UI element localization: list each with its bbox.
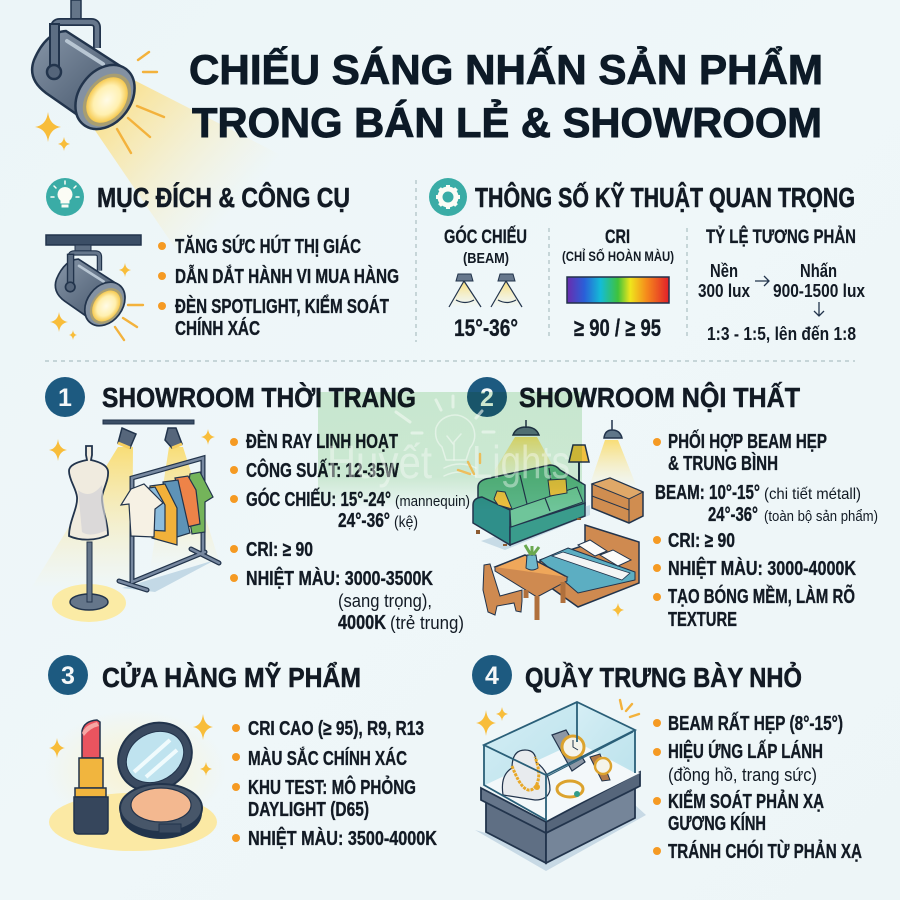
contrast ratio column: Nhấn [800,261,837,281]
bullet list: furniture: & TRUNG BÌNH [668,452,778,475]
bullet list: purpose [158,234,399,340]
bullet list: cosmetics [232,718,437,850]
bullet list: display counter: HIỆU ỨNG LẤP LÁNH [668,739,823,763]
illustration: mannequin and clothing rack [30,420,222,622]
icon: beam lamps [449,274,522,307]
watermark overlay: Lights [472,436,570,488]
bullet list: fashion: NHIỆT MÀU: 3000-3500K [246,566,433,590]
number badge 3: 3 [61,662,75,690]
CRI column [562,227,674,342]
bullet list: furniture: 24°-36° [708,504,758,526]
number badge 2 [467,377,507,417]
watermark overlay: Huyết [327,436,432,488]
bullet list: display counter: (đồng hồ, trang sức) [668,765,817,785]
bullet list: cosmetics: MÀU SẮC CHÍNH XÁC [248,746,407,770]
bullet list: fashion: (kệ) [394,514,418,531]
panel: technical specifications [429,178,865,344]
bullet list: cosmetics: KHU TEST: MÔ PHỎNG [248,775,416,799]
bullet list: fashion: 24°-36° [338,510,390,532]
beam angle column: 15°-36° [454,315,518,342]
bullet list: display counter: BEAM RẤT HẸP (8°-15°) [668,712,843,735]
bullet list: fashion: 4000K [338,612,386,634]
contrast ratio column [698,226,865,344]
contrast ratio column: 900-1500 lux [773,281,865,301]
bullet list: purpose: ĐÈN SPOTLIGHT, KIỂM SOÁT [175,295,389,318]
contrast ratio column: 1:3 - 1:5, lên đến 1:8 [707,324,856,344]
bullet list: cosmetics: DAYLIGHT (D65) [248,799,369,821]
beam angle column: GÓC CHIẾU [444,226,527,248]
bullet list: furniture: BEAM: 10°-15° [655,482,760,504]
bullet list: fashion: GÓC CHIẾU: 15°-24° [246,487,391,511]
title: CHIẾU SÁNG NHẤN SẢN PHẨM [189,45,823,93]
bullet list: fashion: (mannequin) [395,493,470,510]
number badge 1: 1 [58,384,72,412]
arrow: accent to ratio [814,302,824,316]
beam angle column [444,226,527,342]
icon: gear [429,178,467,216]
title: TRONG BÁN LẺ & SHOWROOM [192,98,822,146]
contrast ratio column: 300 lux [698,281,750,301]
bullet list: furniture [653,429,878,631]
number badge 2: 2 [480,384,494,412]
bullet list: display counter: KIỂM SOÁT PHẢN XẠ [668,790,824,813]
bullet list: furniture: (toàn bộ sản phẩm) [764,508,878,525]
illustration: lipstick and compact [45,709,225,851]
panel: 4 small display counter [472,655,862,871]
bullet list: fashion: CRI: ≥ 90 [246,539,313,561]
bullet list: purpose: TĂNG SỨC HÚT THỊ GIÁC [175,234,361,258]
number badge 3 [48,655,88,695]
heading: furniture showroom: SHOWROOM NỘI THẤT [519,381,800,413]
bullet list: fashion [230,430,470,634]
heading: cosmetics store: CỬA HÀNG MỸ PHẨM [102,661,361,693]
number badge 4 [472,655,512,695]
CRI column: CRI [605,227,630,248]
watermark overlay [318,392,582,510]
bullet list: fashion: (trẻ trung) [390,613,464,633]
heading: fashion showroom: SHOWROOM THỜI TRANG [102,382,416,413]
bullet list: cosmetics: NHIỆT MÀU: 3500-4000K [248,826,437,850]
bullet list: display counter: GƯƠNG KÍNH [668,812,766,835]
bullet list: purpose: DẪN DẮT HÀNH VI MUA HÀNG [175,264,399,288]
bullet list: fashion: CÔNG SUẤT: 12-35W [246,458,399,482]
bullet list: purpose: CHÍNH XÁC [175,317,260,340]
arrow: base to accent [755,276,769,286]
CRI colour spectrum [567,277,669,303]
bullet list: furniture: CRI: ≥ 90 [668,530,735,552]
icon: track spotlight [46,235,143,340]
CRI column: ≥ 90 / ≥ 95 [574,315,661,342]
main spotlight illustration [32,0,330,290]
beam angle column: (BEAM) [463,250,509,267]
bullet list: display counter [653,712,862,863]
panel: 2 furniture showroom [467,377,878,631]
panel: 3 cosmetics store [45,655,437,851]
bullet list: fashion: ĐÈN RAY LINH HOẠT [246,430,398,453]
title [189,45,823,146]
heading: purpose and tools: MỤC ĐÍCH & CÔNG CỤ [97,181,350,213]
bullet list: fashion: (sang trọng), [338,591,432,611]
bullet list: cosmetics: CRI CAO (≥ 95), R9, R13 [248,718,424,740]
panel: purpose and tools [46,178,399,340]
panel: 1 fashion showroom [30,377,470,634]
number badge 1 [45,377,85,417]
bullet list: furniture: TEXTURE [668,609,737,631]
contrast ratio column: Nền [710,261,738,281]
bullet list: furniture: NHIỆT MÀU: 3000-4000K [668,556,856,580]
number badge 4: 4 [485,662,499,690]
bullet list: furniture: (chi tiết métall) [764,486,861,503]
illustration: jewellery display case [475,700,646,871]
illustration: furniture set [473,420,643,620]
heading: small display counter: QUẦY TRƯNG BÀY NHỎ [525,661,802,693]
bullet list: furniture: PHỐI HỢP BEAM HẸP [668,429,827,453]
CRI column: (CHỈ SỐ HOÀN MÀU) [562,247,674,264]
contrast ratio column: TỶ LỆ TƯƠNG PHẢN [706,226,856,248]
icon: light bulb [46,178,84,216]
